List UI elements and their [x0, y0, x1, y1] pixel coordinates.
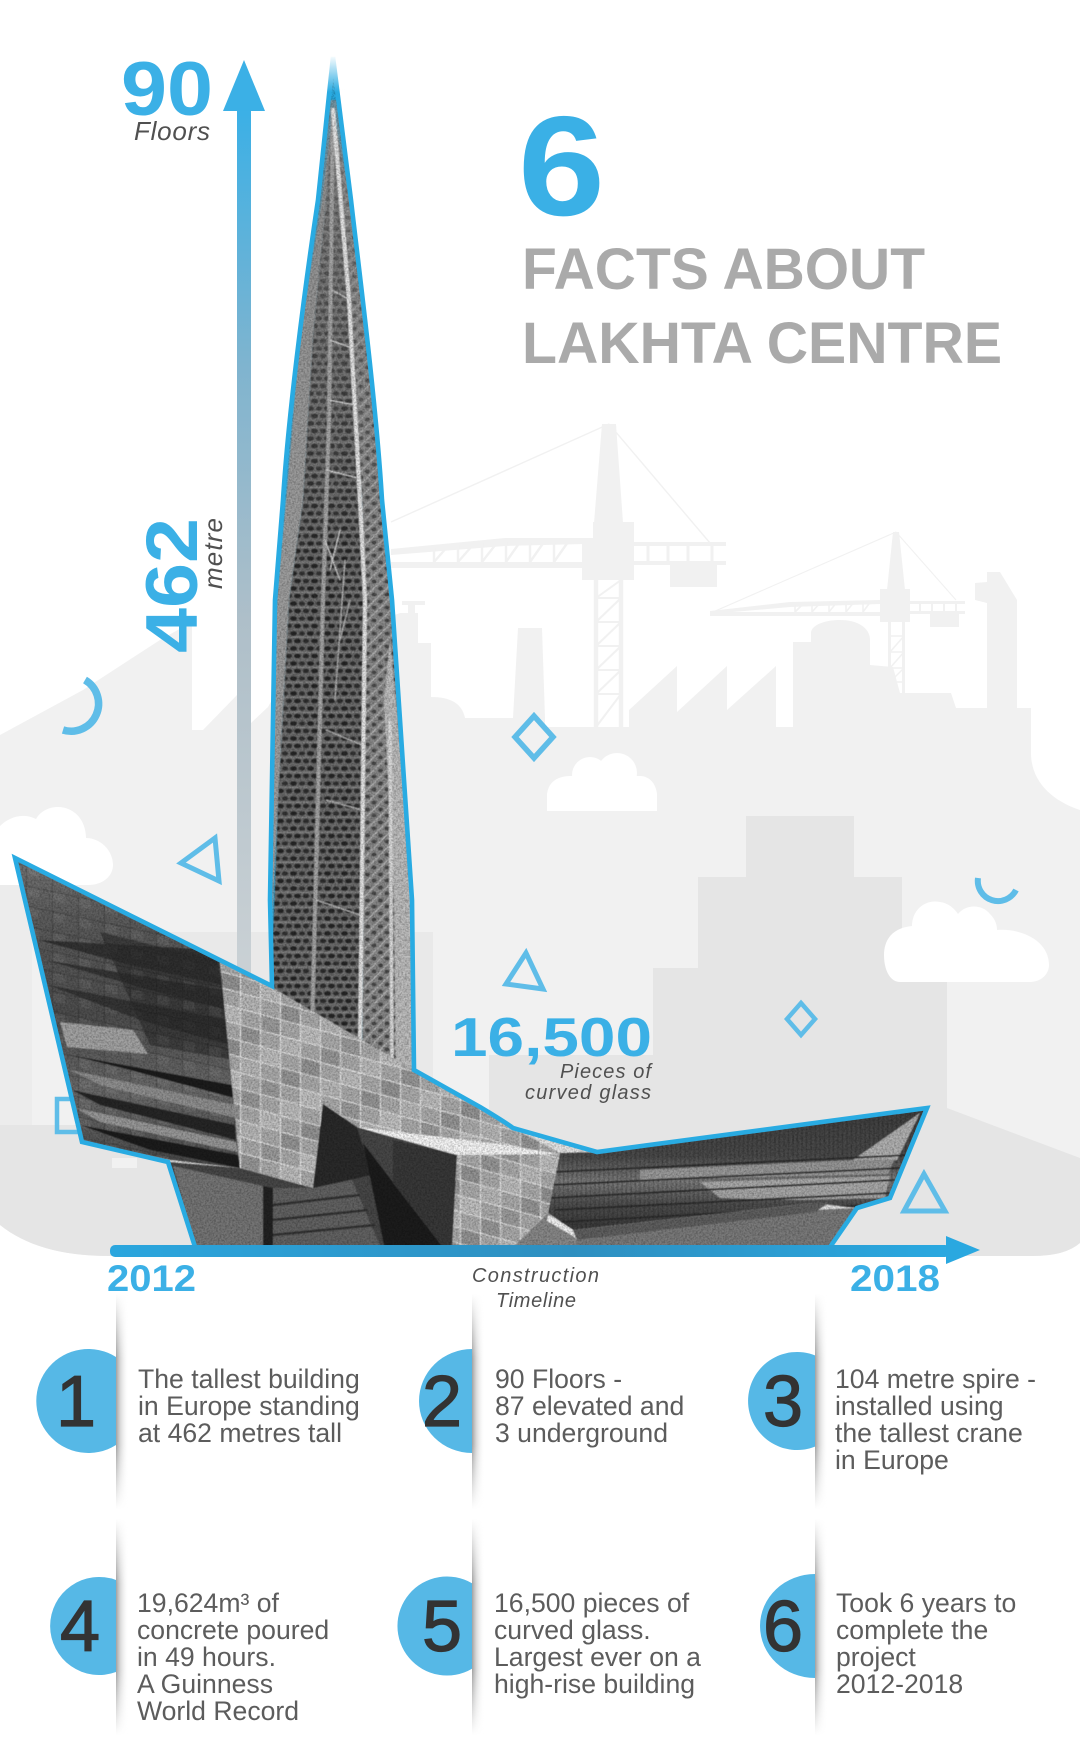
fact 2 divider shadow [472, 1300, 481, 1503]
crane: small [710, 532, 965, 695]
fact 5 number: 5 [422, 1587, 462, 1667]
fact 6 divider shadow [815, 1525, 824, 1729]
timeline labels: 2018 [850, 1258, 940, 1299]
podium: core dark [168, 1104, 457, 1250]
shape: right triangle [904, 1174, 945, 1211]
fact 1 divider shadow [116, 1300, 125, 1503]
podium: lower glass [452, 1153, 560, 1250]
fact 6 [760, 1519, 1016, 1735]
decorative shapes [57, 680, 1016, 1211]
stat: 16,500 pieces: curved glass [525, 1082, 651, 1104]
fact 4 [50, 1519, 329, 1735]
fact 3 divider shadow [815, 1300, 824, 1503]
fact 3 circle [748, 1352, 815, 1450]
podium: low right texture [560, 1208, 857, 1250]
fact 1 text: at 462 metres tall [138, 1418, 342, 1448]
stat: 16,500 pieces [451, 1006, 653, 1104]
fact 1 text: in Europe standing [138, 1391, 360, 1421]
spire centre facet [314, 152, 364, 1038]
clouds [0, 753, 1049, 982]
fact 4 text: in 49 hours. [137, 1642, 276, 1672]
title: LAKHTA CENTRE [522, 311, 1002, 376]
fact 5 text: high-rise building [494, 1669, 695, 1699]
podium: right wing [545, 1105, 930, 1235]
building blue outline [15, 57, 927, 1250]
shape: left square [57, 1099, 97, 1132]
stat: 462 metre: metre [198, 518, 228, 589]
fact 5 text: curved glass. [494, 1615, 651, 1645]
fact 6 text: project [836, 1642, 916, 1672]
fact 2 [419, 1294, 684, 1509]
city skyline silhouette [0, 572, 1080, 1256]
shape: left triangle [181, 838, 219, 881]
shape: left crescent [63, 680, 99, 731]
shape: right crescent [978, 878, 1016, 901]
fact 2 text: 87 elevated and [495, 1391, 684, 1421]
timeline labels: Construction [472, 1265, 599, 1287]
podium [0, 50, 940, 1255]
fact 5 [397, 1519, 701, 1735]
timeline labels: 2012 [107, 1258, 196, 1299]
fact 4 text: World Record [137, 1696, 299, 1726]
fact 4 number: 4 [60, 1587, 100, 1667]
stat: 90 floors: Floors [134, 116, 210, 146]
timeline labels [107, 1258, 940, 1312]
fact 5 divider shadow [472, 1525, 481, 1729]
spire pale right edge [384, 640, 414, 1080]
fact 1 text: The tallest building [138, 1364, 360, 1394]
fact 3 text: 104 metre spire - [835, 1364, 1036, 1394]
spire vertical ribs [312, 108, 333, 1030]
title: 6 [518, 87, 605, 246]
fact 5 text: Largest ever on a [494, 1642, 701, 1672]
height arrow [223, 60, 265, 1000]
shape: centre diamond [515, 716, 553, 758]
fact 2 text: 3 underground [495, 1418, 668, 1448]
fact 6 text: Took 6 years to [836, 1588, 1016, 1618]
crane: large [391, 424, 726, 728]
fact 6 circle [760, 1574, 815, 1678]
tower: Lakhta Centre spire [272, 77, 412, 1069]
building grain [0, 50, 940, 1255]
podium: white sliver [357, 1127, 560, 1155]
spire upper tone [286, 100, 376, 500]
stat: 16,500 pieces: Pieces of [560, 1061, 653, 1083]
construction timeline arrow [110, 1236, 980, 1264]
title [518, 87, 1002, 376]
cloud: right [884, 902, 1049, 982]
fact 1 circle [36, 1349, 116, 1453]
background blocks [0, 816, 1080, 1256]
shape: right diamond [787, 1003, 815, 1035]
spire pale left facet [272, 130, 331, 920]
fact 3 text: in Europe [835, 1445, 949, 1475]
stat: 90 floors: 90 [121, 47, 213, 132]
podium: glass panel [220, 962, 560, 1188]
spire tip fade [320, 50, 346, 92]
fact 3 number: 3 [763, 1362, 803, 1442]
stat: 462 metre: 462 [132, 518, 213, 653]
fact 6 text: 2012-2018 [836, 1669, 963, 1699]
fact 2 text: 90 Floors - [495, 1364, 622, 1394]
cloud: centre [547, 753, 657, 811]
spire dark left facet [273, 146, 331, 1010]
podium: gravel panel [173, 1166, 263, 1250]
fact 4 text: A Guinness [137, 1669, 273, 1699]
spire right facet [337, 134, 412, 1068]
fact 5 circle [397, 1576, 472, 1675]
timeline labels: Timeline [496, 1290, 576, 1312]
podium: left dark wing [18, 862, 240, 1168]
fact 3 [748, 1294, 1036, 1509]
fact 4 circle [50, 1577, 116, 1675]
fact 2 number: 2 [422, 1362, 462, 1442]
fact 3 text: installed using [835, 1391, 1004, 1421]
fact 6 text: complete the [836, 1615, 988, 1645]
title: FACTS ABOUT [522, 237, 925, 302]
spire blue body [272, 77, 363, 1040]
cloud: left [0, 807, 113, 885]
fact 3 text: the tallest crane [835, 1418, 1023, 1448]
stat: 16,500 pieces: 16,500 [451, 1006, 652, 1068]
fact 2 circle [419, 1349, 472, 1453]
fact 5 text: 16,500 pieces of [494, 1588, 690, 1618]
fact 1 number: 1 [56, 1362, 96, 1442]
shape: centre triangle [506, 953, 543, 989]
fact 4 text: 19,624m³ of [137, 1588, 280, 1618]
fact 4 text: concrete poured [137, 1615, 329, 1645]
fact 1 [36, 1294, 360, 1509]
podium: beam [573, 1202, 830, 1240]
fact 4 divider shadow [116, 1525, 125, 1729]
fact 6 number: 6 [763, 1587, 803, 1667]
